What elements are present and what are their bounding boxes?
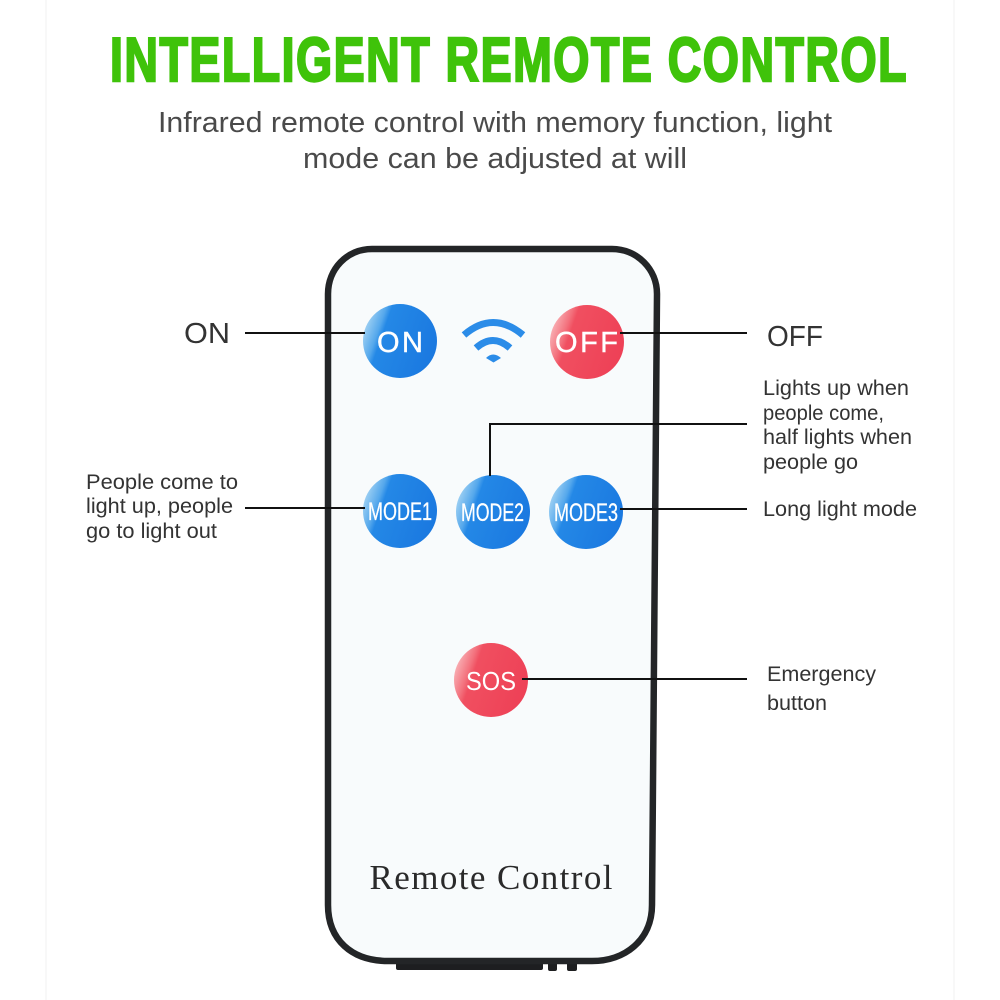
callout: MODE3: Long light mode <box>763 498 917 521</box>
callout: MODE1 <box>86 471 365 543</box>
subtitle: Infrared remote control with memory function, light <box>158 107 832 139</box>
button: MODE1 <box>363 474 437 548</box>
button: ON: ON <box>377 327 423 359</box>
button: OFF: OFF <box>555 327 618 359</box>
subtitle: mode can be adjusted at will <box>303 143 687 175</box>
callout: SOS: Emergency <box>767 663 877 686</box>
button: SOS <box>454 643 528 717</box>
callout: MODE2: people come, <box>763 402 884 425</box>
subtitle <box>158 107 832 175</box>
remote control label: Remote Control <box>370 858 613 897</box>
callout: SOS <box>522 663 877 715</box>
callout: OFF: OFF <box>767 321 823 353</box>
callout: MODE2: Lights up when <box>763 377 909 400</box>
button: MODE3: MODE3 <box>554 499 618 527</box>
icon: wifi signal <box>464 322 523 362</box>
button: MODE2 <box>456 475 530 549</box>
button: MODE2: MODE2 <box>461 499 524 527</box>
callout: ON: ON <box>184 318 230 350</box>
button: OFF <box>550 305 624 379</box>
callout: MODE1: light up, people <box>86 495 233 518</box>
button: ON <box>363 304 437 378</box>
callout: MODE2: half lights when <box>763 426 912 449</box>
callout: MODE2: people go <box>763 451 858 474</box>
button: MODE1: MODE1 <box>368 498 432 526</box>
callout: MODE1: People come to <box>86 471 238 494</box>
callout: SOS: button <box>767 692 827 715</box>
remote control body <box>328 249 657 971</box>
button: SOS: SOS <box>466 666 516 696</box>
callout: MODE2 <box>490 377 912 476</box>
button: MODE3 <box>549 475 623 549</box>
callout: MODE1: go to light out <box>86 520 217 543</box>
